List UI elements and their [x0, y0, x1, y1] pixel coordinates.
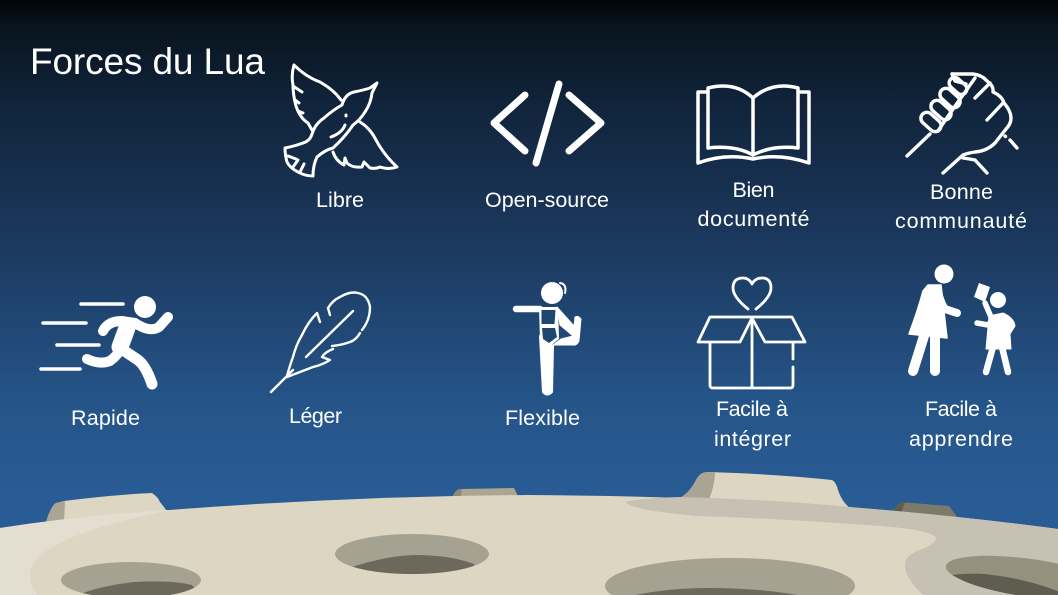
rock: small dark: [892, 502, 958, 518]
icon: runner (Rapide): [41, 296, 168, 384]
label: Facile à intégrer: [714, 397, 791, 451]
icon: clasped hands (Bonne communauté): [907, 74, 1017, 173]
label: Rapide: Rapide: [71, 406, 140, 430]
rock: left: [46, 493, 167, 530]
shaded surface area: [626, 497, 1058, 595]
label: Facile à apprendre: apprendre: [909, 427, 1013, 451]
label: Open-source: Open-source: [485, 188, 609, 212]
label: Bonne communauté: [895, 180, 1027, 233]
icon: box with heart (Facile à intégrer): [698, 278, 805, 388]
crater 2: [335, 534, 489, 574]
moon surface: [0, 495, 1058, 595]
crater 4: [946, 556, 1058, 595]
lighter surface area: [0, 510, 169, 595]
label: Facile à intégrer: intégrer: [714, 427, 791, 451]
rock: large right: [680, 472, 850, 508]
icon: teacher and child (Facile à apprendre): [909, 264, 1015, 372]
label: Bonne communauté: communauté: [895, 209, 1027, 233]
title: Forces du Lua: [30, 41, 265, 82]
label: Léger: Léger: [289, 404, 342, 428]
crater 1: [61, 562, 205, 595]
label: Facile à apprendre: [909, 397, 1013, 451]
label: Bonne communauté: Bonne: [930, 180, 993, 204]
label: Flexible: Flexible: [505, 406, 580, 430]
rock: middle: [453, 488, 518, 496]
icon: bird (Libre): [285, 65, 397, 176]
moon landscape: [0, 472, 1058, 595]
icon: stretching figure (Flexible): [516, 282, 581, 394]
label: Bien documenté: Bien: [732, 178, 774, 202]
icon: open book (Bien documenté): [698, 86, 809, 163]
label: Bien documenté: [698, 178, 810, 231]
icon: feather (Léger): [271, 292, 370, 392]
crater 3: [605, 558, 855, 595]
label: Facile à apprendre: Facile à: [925, 397, 997, 421]
label: Libre: Libre: [316, 188, 364, 212]
label: Facile à intégrer: Facile à: [716, 397, 788, 421]
icon: code brackets (Open-source): [494, 84, 601, 163]
label: Bien documenté: documenté: [698, 207, 810, 231]
